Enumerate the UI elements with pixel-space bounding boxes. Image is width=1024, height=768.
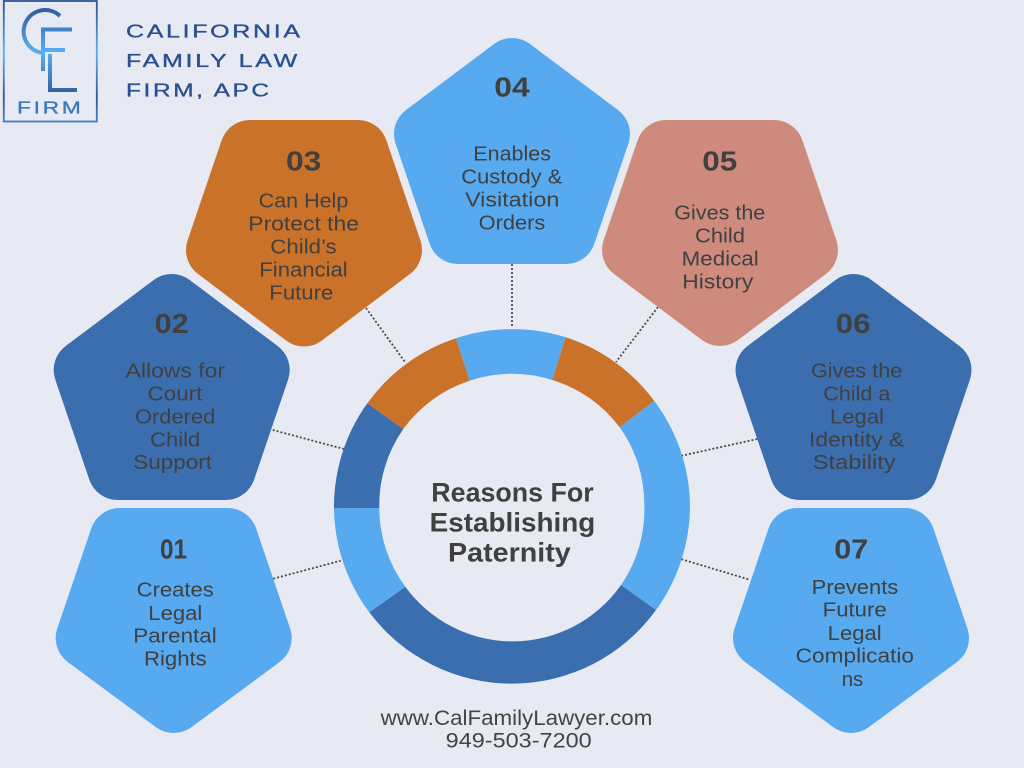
panel: 04 enables custody and visitation orders: Enables	[473, 143, 551, 166]
connector: 07	[681, 559, 748, 579]
panel: 05 gives the child medical history: Medical	[682, 248, 759, 271]
panel: 06 gives the child a legal identity and stability: Stability	[813, 451, 897, 474]
logo: FIRM	[17, 97, 84, 117]
panel: 02 allows for court ordered child support: Court	[148, 383, 203, 406]
panel: 02 allows for court ordered child support: Child	[150, 429, 200, 452]
connector: 06	[682, 439, 757, 456]
panel: 02 allows for court ordered child support: Allows for	[126, 360, 225, 383]
center title	[430, 478, 595, 568]
connector: 03	[366, 308, 405, 362]
center title: Establishing	[430, 508, 595, 538]
panel: 03 can help protect the child's financial future: 03	[286, 146, 321, 177]
firm name	[126, 20, 303, 101]
panel: 03 can help protect the child's financial future	[216, 146, 392, 316]
firm name: CALIFORNIA	[126, 20, 303, 41]
center title: Paternity	[448, 538, 571, 568]
panel: 06 gives the child a legal identity and stability: Gives the	[811, 360, 902, 383]
panel: 05 gives the child medical history: Gives the	[674, 202, 765, 225]
footer contact	[380, 707, 652, 753]
panel: 07 prevents future legal complications: Complicatio	[796, 645, 914, 668]
panel: 01 creates legal parental rights	[86, 534, 262, 703]
panel: 06 gives the child a legal identity and stability: Legal	[830, 405, 884, 428]
connector: 01	[273, 561, 341, 579]
panel: 04 enables custody and visitation orders: Custody &	[461, 166, 563, 189]
panel: 07 prevents future legal complications: Legal	[828, 622, 882, 645]
connector: 05	[616, 307, 658, 362]
ring chart	[334, 329, 690, 684]
connector: 04	[511, 264, 513, 327]
connector: 02	[273, 430, 344, 449]
panel: 01 creates legal parental rights: Creates	[137, 579, 214, 602]
logo	[4, 1, 97, 122]
panel: 03 can help protect the child's financial future: Future	[269, 281, 333, 304]
panel: 03 can help protect the child's financial future: Child’s	[270, 235, 337, 258]
panel: 05 gives the child medical history	[632, 146, 808, 316]
panel: 04 enables custody and visitation orders: Visitation	[465, 189, 559, 212]
panel: 01 creates legal parental rights: Legal	[148, 602, 202, 625]
panel: 02 allows for court ordered child support: 02	[155, 308, 189, 339]
panel: 06 gives the child a legal identity and stability: Identity &	[809, 429, 905, 452]
panel: 03 can help protect the child's financial future: Financial	[259, 258, 348, 281]
panel: 07 prevents future legal complications: 07	[834, 534, 868, 565]
panel: 05 gives the child medical history: History	[682, 271, 754, 294]
panel: 06 gives the child a legal identity and stability	[766, 304, 942, 474]
firm name: FIRM, APC	[126, 80, 272, 101]
panel: 05 gives the child medical history: 05	[702, 146, 737, 177]
panel: 06 gives the child a legal identity and stability: 06	[836, 308, 871, 339]
panel: 04 enables custody and visitation orders	[424, 68, 600, 234]
panel: 01 creates legal parental rights: 01	[160, 534, 187, 565]
footer contact: 949-503-7200	[446, 730, 592, 753]
footer contact: www.CalFamilyLawyer.com	[380, 707, 652, 730]
firm name: FAMILY LAW	[126, 50, 300, 71]
panel: 01 creates legal parental rights: Parental	[133, 625, 217, 648]
panel: 04 enables custody and visitation orders: 04	[494, 72, 530, 103]
panel: 02 allows for court ordered child support: Ordered	[135, 405, 215, 428]
panel: 03 can help protect the child's financial future: Can Help	[259, 190, 348, 213]
panel: 07 prevents future legal complications	[763, 534, 939, 703]
panel: 02 allows for court ordered child support: Support	[133, 451, 212, 474]
panel: 07 prevents future legal complications: Prevents	[812, 576, 898, 599]
center title: Reasons For	[431, 478, 594, 508]
panel: 03 can help protect the child's financial future: Protect the	[248, 212, 359, 235]
panel: 01 creates legal parental rights: Rights	[144, 648, 207, 671]
panel: 07 prevents future legal complications: Future	[823, 599, 887, 622]
panel: 04 enables custody and visitation orders: Orders	[479, 211, 545, 234]
panel: 07 prevents future legal complications: ns	[842, 668, 863, 691]
panel: 06 gives the child a legal identity and stability: Child a	[823, 383, 891, 406]
panel: 02 allows for court ordered child support	[84, 304, 260, 474]
panel: 05 gives the child medical history: Child	[695, 225, 745, 248]
